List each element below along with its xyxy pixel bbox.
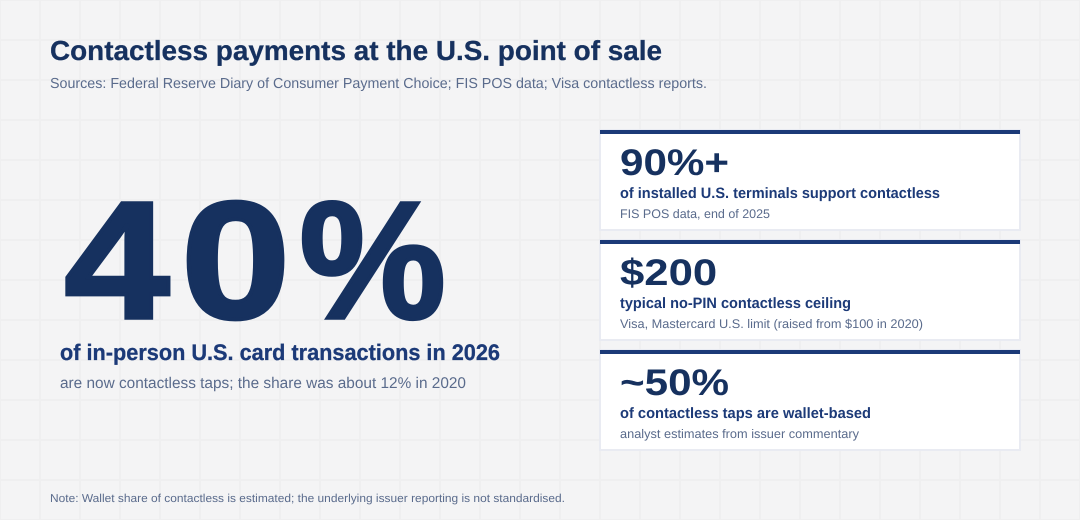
panel: no-PIN ceiling card [600,240,1020,340]
card source: Visa, Mastercard U.S. limit (raised from $100 in 2020) [620,317,923,331]
card label: of installed U.S. terminals support contactless [620,185,940,202]
hero number: % [300,168,446,354]
card label: of contactless taps are wallet-based [620,405,871,422]
subtitle: sources: Sources: Federal Reserve Diary of Consumer Payment Choice; FIS POS data; Visa contactless reports. [50,76,707,92]
card label: typical no-PIN contactless ceiling [620,295,851,312]
hero number: 4 [64,168,169,354]
panel: terminals card [600,130,1020,230]
card value: 90%+ [620,142,729,183]
card value: $200 [620,252,717,293]
panel: wallet share card [600,350,1020,450]
card source: FIS POS data, end of 2025 [620,207,770,221]
hero detail: are now contactless taps; the share was about 12% in 2020 [60,375,466,392]
hero number [64,168,446,354]
title: Contactless payments at the U.S. point of sale [50,35,662,66]
hero label: of in-person U.S. card transactions in 2026 [60,340,500,365]
footnote: Note: Wallet share of contactless is estimated; the underlying issuer reporting is not standardised. [50,493,565,505]
card source: analyst estimates from issuer commentary [620,427,860,441]
panel: hero statistic [60,168,500,392]
card value: ~50% [620,362,729,403]
hero number: 0 [181,168,290,354]
